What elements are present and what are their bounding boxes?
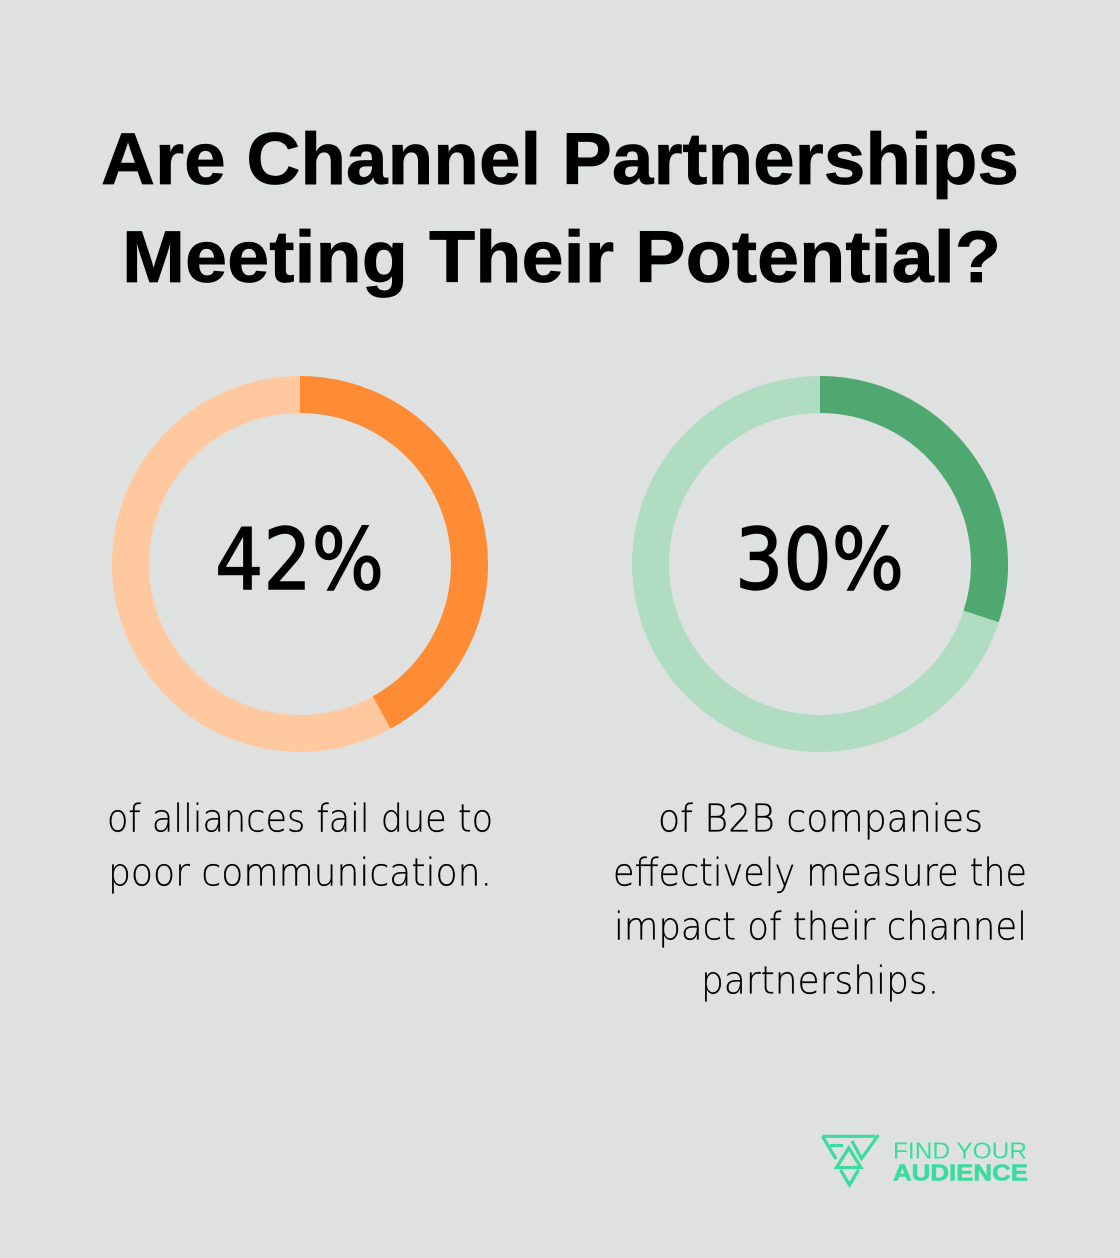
- title: Are Channel Partnerships: [101, 119, 1019, 200]
- wordmark: [893, 1137, 1028, 1185]
- donut chart: 30%: [650, 394, 990, 734]
- description: B2B companies: impact of their channel: [614, 904, 1027, 948]
- panel: 42% stat: [107, 394, 493, 894]
- donut chart: 42%: [130, 394, 470, 734]
- wordmark: AUDIENCE: [893, 1159, 1028, 1185]
- description: B2B companies: [613, 796, 1027, 1002]
- title: [101, 119, 1019, 298]
- title: Meeting Their Potential?: [122, 217, 1001, 298]
- icon: triangle mark: [822, 1135, 878, 1185]
- description: alliances: [107, 796, 493, 894]
- description: B2B companies: of B2B companies: [658, 796, 983, 840]
- description: B2B companies: partnerships.: [701, 958, 939, 1002]
- description: B2B companies: effectively measure the: [613, 850, 1027, 894]
- description: alliances: of alliances fail due to: [107, 796, 493, 840]
- wordmark: FIND YOUR: [893, 1137, 1027, 1163]
- stat number: 30%: 30%: [735, 511, 904, 610]
- logo: Find Your Audience: [822, 1135, 1028, 1185]
- description: alliances: poor communication.: [108, 850, 492, 894]
- panel: 30% stat: [613, 394, 1027, 1002]
- stat number: 42%: 42%: [215, 511, 384, 610]
